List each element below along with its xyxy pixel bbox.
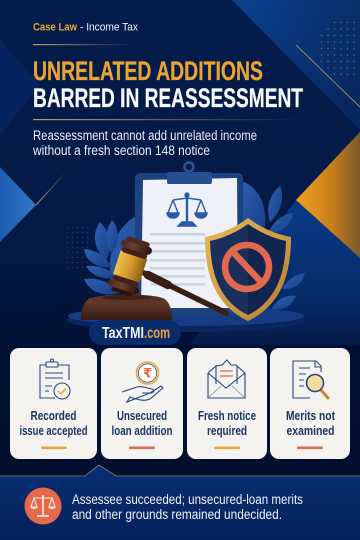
icon: clipboard with check: [40, 359, 70, 399]
badge: TaxTMI.com: TaxTMI: [102, 325, 144, 342]
label: issue accepted: [20, 423, 88, 438]
label: Unsecured: [117, 408, 167, 423]
kicker: Case Law - Income Tax: Case Law: [33, 22, 77, 34]
kicker: Case Law - Income Tax: [33, 22, 138, 34]
badge: TaxTMI.com: .com: [144, 325, 170, 342]
conclusion text: [72, 492, 303, 522]
gavel: [106, 234, 226, 313]
card: fresh notice required: [187, 348, 267, 459]
conclusion text: and other grounds remained undecided.: [72, 507, 282, 522]
card: merits not examined: [270, 348, 350, 459]
label: [198, 408, 256, 438]
panel: conclusion: [0, 465, 360, 540]
badge: TaxTMI.com: [89, 320, 181, 345]
clipboard: [135, 162, 243, 315]
conclusion text: Assessee succeeded; unsecured-loan merits: [72, 492, 303, 507]
icon: open envelope: [208, 360, 245, 398]
title: [33, 56, 303, 113]
illustration: legal hero: [67, 162, 305, 332]
title: UNRELATED ADDITIONS: [33, 56, 263, 86]
platform: [67, 308, 305, 332]
label: Merits not: [286, 408, 336, 423]
decorative leaves: [84, 180, 305, 309]
label: loan addition: [112, 423, 173, 438]
label: examined: [286, 423, 335, 438]
icon: document and magnifier: [293, 361, 328, 398]
gavel sounding block: [81, 294, 172, 320]
card: recorded issue accepted: [10, 348, 97, 459]
subtitle: [32, 128, 257, 158]
document lines: [150, 233, 205, 286]
label: Recorded: [30, 408, 77, 423]
kicker: Case Law - Income Tax: - Income Tax: [80, 22, 138, 34]
subtitle: Reassessment cannot add unrelated income: [33, 128, 257, 143]
label: required: [207, 423, 247, 438]
dot pattern: [66, 18, 355, 272]
scales icon: [167, 193, 207, 226]
subtitle: without a fresh section 148 notice: [32, 143, 210, 158]
icon: rupee coin and hand: ₹: [143, 366, 152, 382]
label: [20, 408, 88, 438]
label: [112, 408, 173, 438]
card: unsecured loan addition: [101, 348, 183, 459]
icon: scales in orange circle: [24, 488, 62, 524]
label: [286, 408, 336, 438]
shield with prohibition sign: [205, 218, 291, 321]
label: Fresh notice: [198, 408, 256, 423]
